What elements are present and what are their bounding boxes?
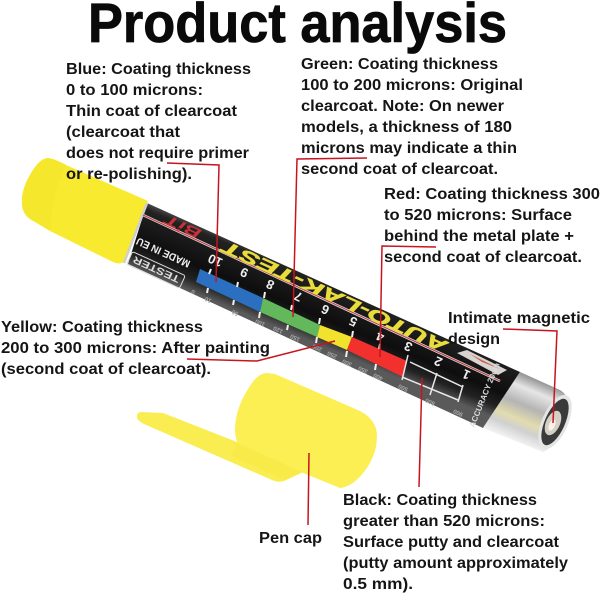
warning label <box>457 350 507 375</box>
label: green <box>301 56 523 178</box>
leader line: yellow <box>187 341 335 361</box>
scale digits <box>206 251 473 383</box>
scale: yellow band <box>317 325 352 350</box>
label: green: 100 to 200 microns: Original <box>301 77 523 94</box>
micron labels: 300 <box>341 357 353 367</box>
clip shadow <box>232 443 302 480</box>
label: magnetic design: design <box>448 331 500 348</box>
tester badge: TESTER <box>131 253 182 284</box>
scale: black band <box>402 355 463 402</box>
silver rim <box>124 203 147 263</box>
tester badge <box>127 252 185 288</box>
micron labels: 900 <box>452 407 464 417</box>
stripes on pen <box>143 215 500 381</box>
yellow pen end cap <box>22 158 148 264</box>
scale digits: 3 <box>402 338 415 355</box>
micron labels <box>190 287 464 417</box>
label: yellow: 200 to 300 microns: After painting <box>1 340 270 357</box>
micron labels: 350 <box>357 364 369 374</box>
label: green: microns may indicate a thin <box>301 140 517 157</box>
scale digits: 8 <box>264 276 277 293</box>
micron labels: 150 <box>289 332 301 342</box>
pen cap <box>137 373 377 488</box>
label: black: Surface putty and clearcoat <box>343 534 559 551</box>
label: blue: does not require primer <box>66 145 249 162</box>
label: blue <box>66 61 251 183</box>
leader line: pen cap <box>308 453 309 525</box>
label: green: models, a thickness of 180 <box>301 119 512 136</box>
label: blue: or re-polishing). <box>66 166 192 183</box>
cap barrel <box>235 373 377 488</box>
made in EU: MADE IN EU <box>135 235 192 270</box>
leader line: red <box>380 246 436 357</box>
label: green: Green: Coating thickness <box>301 56 498 73</box>
label: magnetic design: Intimate magnetic <box>448 310 590 327</box>
micron labels: 120 <box>272 324 284 334</box>
label: red: second coat of clearcoat. <box>384 249 582 266</box>
scale digits: 1 <box>460 366 473 383</box>
pen name text: AUTO-LAK-TEST <box>217 236 452 357</box>
label: yellow: (second coat of clearcoat). <box>1 361 211 378</box>
cap clip <box>137 412 312 482</box>
label: black <box>343 492 568 593</box>
label: yellow <box>1 319 270 378</box>
label: blue: Blue: Coating thickness <box>66 61 251 78</box>
label: black: Black: Coating thickness <box>343 492 537 509</box>
scale digits: 6 <box>319 301 332 318</box>
leader line: green <box>293 158 367 317</box>
label: yellow: Yellow: Coating thickness <box>1 319 203 336</box>
label: red: to 520 microns: Surface <box>384 207 572 224</box>
micron labels: 400 <box>372 371 384 381</box>
label: blue: 0 to 100 microns: <box>66 82 203 99</box>
scale digits: 10 <box>206 251 225 270</box>
leader line: blue <box>167 163 219 282</box>
label: black: (putty amount approximately <box>343 555 568 572</box>
label: green: clearcoat. Note: On newer <box>301 98 504 115</box>
metal tip <box>483 372 579 454</box>
label: green: second coat of clearcoat. <box>301 161 498 178</box>
scale ticks <box>207 269 380 370</box>
pen body <box>128 203 520 428</box>
micron labels: 0 <box>190 287 196 295</box>
label: blue: Thin coat of clearcoat <box>66 103 237 120</box>
label: pen cap: Pen cap <box>259 530 322 547</box>
label: red <box>384 186 600 266</box>
scale: green band <box>260 298 320 337</box>
label: blue: (clearcoat that <box>66 124 180 141</box>
leader line: magnetic design <box>503 329 557 423</box>
scale: red band <box>347 337 407 377</box>
micron labels: 50 <box>231 308 240 316</box>
micron labels: 100 <box>254 317 266 327</box>
scale digits: 9 <box>238 264 251 281</box>
label: magnetic design <box>448 310 590 348</box>
accuracy text: ACCURACY 20um <box>468 361 502 429</box>
pen tester <box>22 158 579 454</box>
scale digits: 7 <box>292 288 305 305</box>
label: red: behind the metal plate + <box>384 228 574 245</box>
micron labels: 250 <box>326 349 338 359</box>
label: red: Red: Coating thickness 300 <box>384 186 600 203</box>
scale: blue band <box>196 269 263 312</box>
label: black: greater than 520 microns: <box>343 513 545 530</box>
leader line: black <box>419 378 422 487</box>
scale digits: 2 <box>432 353 445 370</box>
brand mark: BiT <box>160 211 204 242</box>
scale digits: 4 <box>373 328 387 345</box>
micron labels: 500 <box>397 382 409 392</box>
label: black: 0.5 mm). <box>343 576 413 593</box>
micron labels: 10 <box>204 295 213 303</box>
scale digits: 5 <box>347 313 360 330</box>
micron labels: 200 <box>311 342 323 352</box>
micron labels: 800 <box>424 396 436 406</box>
